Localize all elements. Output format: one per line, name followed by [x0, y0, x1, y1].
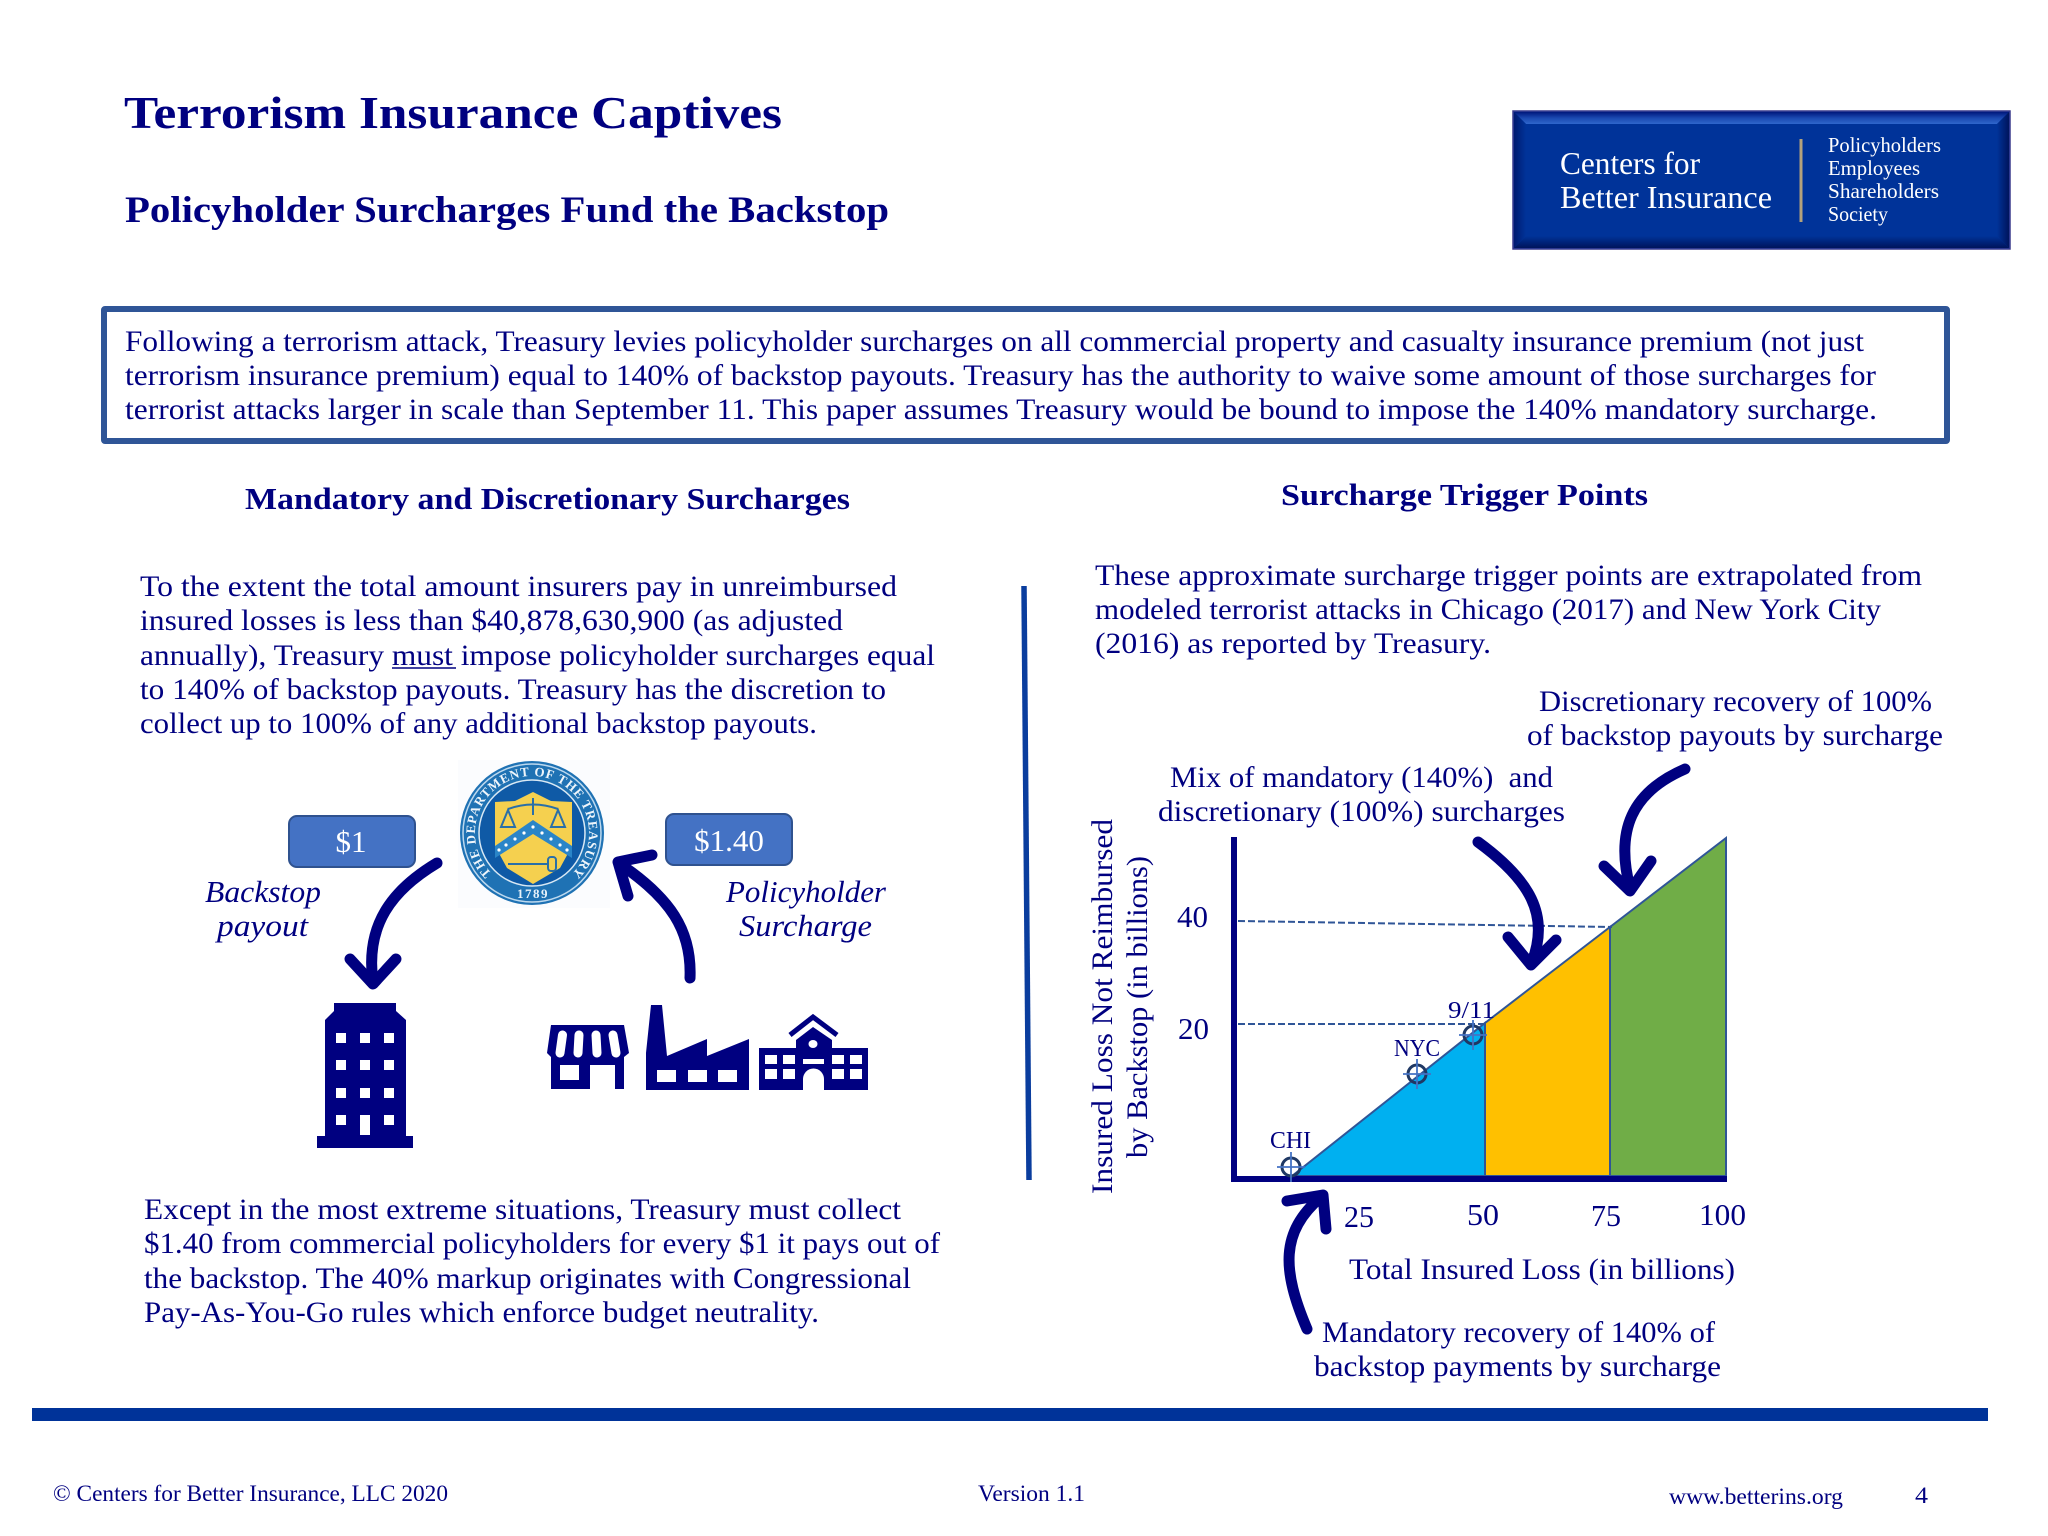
footer: page number: 4 [1915, 1483, 1929, 1508]
label: $1 box: $1 [336, 824, 366, 859]
text block: mandatory surcharge explanation: to 140% of backstop payouts. Treasury has the discretion to [140, 673, 886, 706]
label: Backstop payout: payout [215, 908, 309, 943]
logo: Centers for Better Insurance: Employees [1828, 156, 1920, 180]
annotation: mandatory recovery [1314, 1316, 1721, 1383]
text block: trigger points explanation: These approximate surcharge trigger points are extrapolated from [1095, 559, 1922, 592]
y axis tick labels [1177, 899, 1209, 1046]
y axis title [1086, 819, 1154, 1194]
icon: factory [646, 1005, 749, 1090]
annotation: mandatory recovery: backstop payments by surcharge [1314, 1350, 1721, 1383]
x axis tick labels [1344, 1197, 1746, 1234]
text block: $1.40 collection explanation: $1.40 from commercial policyholders for every $1 it pays out of [144, 1227, 940, 1260]
y axis title: by Backstop (in billions) [1121, 856, 1154, 1158]
heading: Surcharge Trigger Points: Surcharge Trigger Points [1281, 477, 1648, 512]
chart area: mandatory (blue) [1292, 1023, 1485, 1176]
annotation: mix of surcharges: discretionary (100%) surcharges [1158, 795, 1565, 828]
chart area: mix (yellow) [1485, 927, 1610, 1176]
y axis tick labels: 40 [1177, 899, 1208, 934]
text block: mandatory surcharge explanation: collect up to 100% of any additional backstop payouts. [140, 707, 817, 740]
arrow: policyholders to Treasury [618, 855, 690, 978]
logo: Centers for Better Insurance: Society [1828, 202, 1888, 226]
text block: mandatory surcharge explanation [140, 570, 935, 740]
title: Terrorism Insurance Captives [124, 87, 782, 138]
label: $1.40 box [666, 814, 792, 865]
label: Policyholder Surcharge: Policyholder [725, 874, 887, 909]
text block: $1.40 collection explanation [144, 1193, 940, 1329]
axes [1234, 837, 1727, 1179]
text block: trigger points explanation [1095, 559, 1922, 660]
label: $1 box [289, 816, 415, 867]
text block: $1.40 collection explanation: Pay-As-You-Go rules which enforce budget neutrality. [144, 1296, 819, 1329]
text block: trigger points explanation: modeled terrorist attacks in Chicago (2017) and New York City [1095, 593, 1881, 626]
icon: Department of the Treasury seal: 1789 [517, 886, 549, 901]
marker: NYC: NYC [1394, 1036, 1440, 1062]
marker: CHI [1270, 1128, 1311, 1182]
label: Backstop payout: Backstop [205, 874, 321, 909]
label: Policyholder Surcharge [725, 874, 887, 943]
annotation: mix of surcharges [1158, 761, 1565, 828]
chart area: discretionary (green) [1610, 838, 1726, 1176]
callout: intro box [104, 309, 1947, 441]
x axis tick labels: 25 [1344, 1199, 1374, 1234]
annotation: discretionary recovery: Discretionary recovery of 100% [1539, 685, 1932, 718]
annotation: mix of surcharges: Mix of mandatory (140%) and [1170, 761, 1553, 794]
marker: 9/11: 9/11 [1448, 998, 1495, 1024]
arrow: mix pointer [1478, 842, 1556, 965]
marker: 9/11 [1448, 998, 1495, 1050]
arrow: discretionary pointer [1604, 769, 1685, 891]
icon: Department of the Treasury seal: THE DEPARTMENT OF THE TREASURY [466, 767, 598, 880]
arrow: Treasury to building [350, 863, 437, 984]
logo: Centers for Better Insurance: Centers for [1560, 145, 1700, 181]
footer: copyright: © Centers for Better Insurance, LLC 2020 [53, 1481, 448, 1506]
annotation: discretionary recovery [1527, 685, 1943, 752]
label: Policyholder Surcharge: Surcharge [739, 908, 872, 943]
y axis title: Insured Loss Not Reimbursed [1086, 819, 1119, 1194]
chart: surcharge trigger points [1086, 819, 1746, 1286]
x axis tick labels: 100 [1699, 1197, 1746, 1232]
arrow: mandatory pointer [1287, 1195, 1326, 1329]
logo: Centers for Better Insurance: Shareholders [1828, 179, 1939, 203]
text block: mandatory surcharge explanation: annually), Treasury must impose policyholder surcharges equal [140, 639, 935, 672]
callout: intro box: terrorism insurance premium) equal to 140% of backstop payouts. Treasury has the authority to waive some amount of those surcharges for [125, 359, 1876, 392]
text block: mandatory surcharge explanation: To the extent the total amount insurers pay in unreimbursed [140, 570, 897, 603]
subtitle: Policyholder Surcharges Fund the Backstop [125, 190, 889, 231]
logo: Centers for Better Insurance: Policyholders [1828, 133, 1941, 157]
footer bar [32, 1408, 1988, 1421]
y axis tick labels: 20 [1178, 1011, 1209, 1046]
x axis tick labels: 75 [1591, 1198, 1621, 1233]
text block: $1.40 collection explanation: Except in the most extreme situations, Treasury must collect [144, 1193, 902, 1226]
icon: school [759, 1017, 868, 1090]
label: Backstop payout [205, 874, 321, 943]
text block: $1.40 collection explanation: the backstop. The 40% markup originates with Congressional [144, 1262, 911, 1295]
x axis tick labels: 50 [1467, 1197, 1499, 1232]
callout: intro box: terrorist attacks larger in scale than September 11. This paper assumes Treasury would be bound to impose the 140% mandatory surcharge. [125, 393, 1877, 426]
heading: Mandatory and Discretionary Surcharges: Mandatory and Discretionary Surcharges [245, 481, 850, 516]
logo: Centers for Better Insurance: Better Insurance [1560, 179, 1772, 215]
divider line between columns [1024, 586, 1029, 1180]
callout: intro box: Following a terrorism attack, Treasury levies policyholder surcharges on all commercial property and casualty insurance premium (not just [125, 325, 1865, 358]
marker: CHI: CHI [1270, 1128, 1311, 1154]
x axis title: Total Insured Loss (in billions) [1349, 1253, 1735, 1286]
icon: storefront [547, 1025, 629, 1089]
icon: office building [317, 1003, 413, 1148]
annotation: discretionary recovery: of backstop payouts by surcharge [1527, 719, 1943, 752]
footer: version: Version 1.1 [978, 1481, 1085, 1506]
text block: trigger points explanation: (2016) as reported by Treasury. [1095, 627, 1491, 660]
footer: website: www.betterins.org [1669, 1484, 1844, 1509]
text block: mandatory surcharge explanation: insured losses is less than $40,878,630,900 (as adjusted [140, 604, 843, 637]
logo: Centers for Better Insurance [1513, 111, 2010, 249]
annotation: mandatory recovery: Mandatory recovery of 140% of [1322, 1316, 1715, 1349]
marker: NYC [1394, 1036, 1440, 1089]
label: $1.40 box: $1.40 [694, 823, 764, 858]
